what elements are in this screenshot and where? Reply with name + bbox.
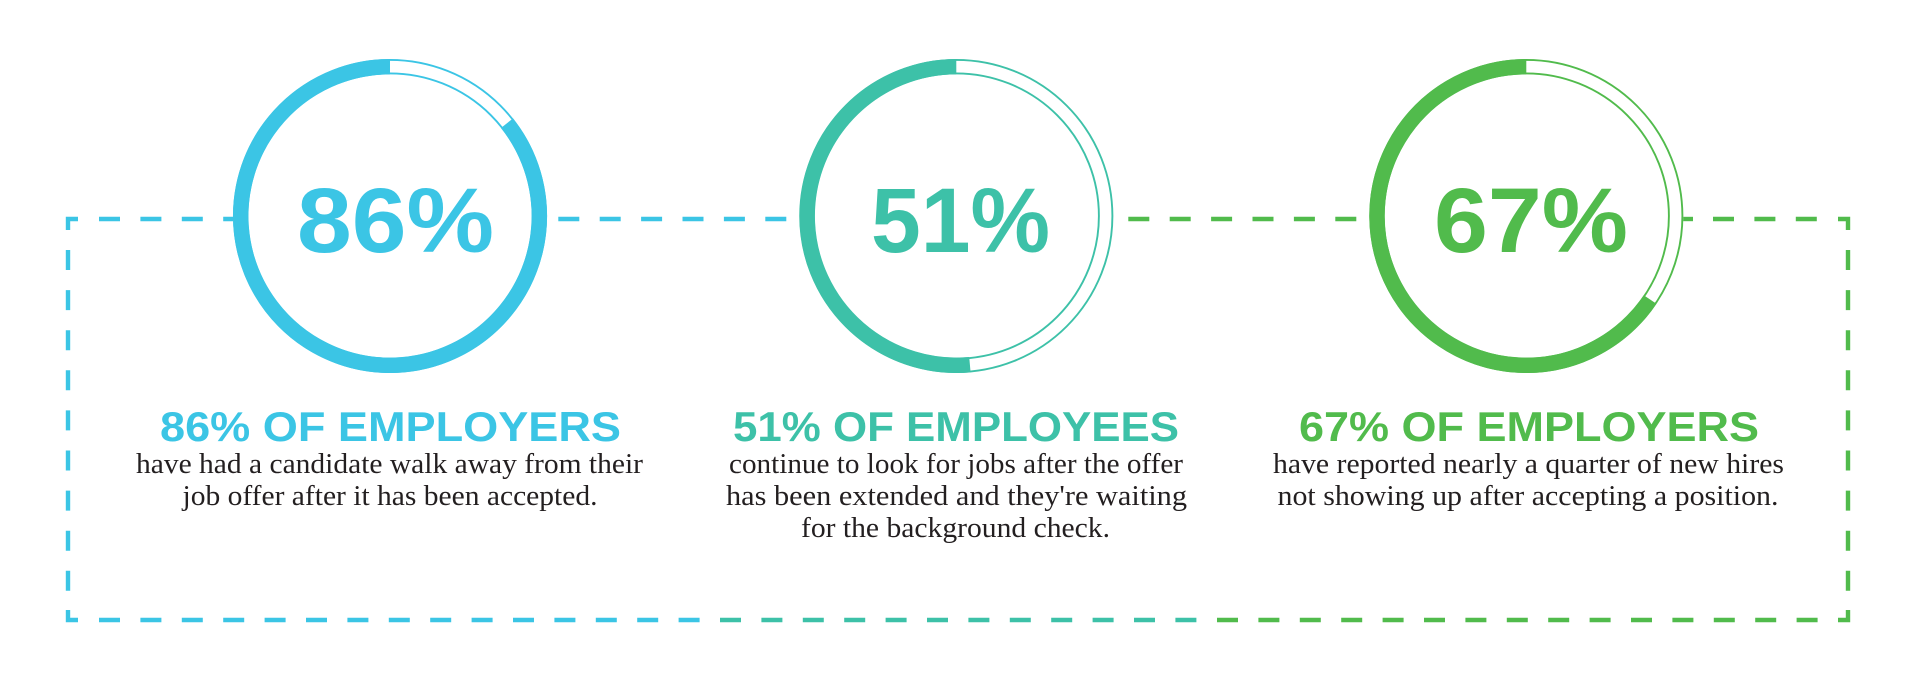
description: [1273, 449, 1784, 512]
description: not showing up after accepting a position.: [1278, 481, 1778, 512]
description: have had a candidate walk away from their: [136, 449, 644, 480]
big number 86%: 86%: [297, 170, 494, 272]
description: for the background check.: [801, 513, 1110, 544]
big number 67%: 67%: [1434, 170, 1628, 272]
big number 51%: 51%: [871, 170, 1050, 272]
description: job offer after it has been accepted.: [181, 481, 598, 512]
description: [136, 449, 644, 512]
description: [726, 449, 1187, 544]
description: continue to look for jobs after the offer: [729, 449, 1184, 480]
description: have reported nearly a quarter of new hires: [1273, 449, 1784, 480]
panel: 51% of employees: [726, 59, 1187, 544]
dashed connector frame: [68, 219, 1848, 620]
ring: 51% progress: [799, 59, 1113, 373]
panel: 67% of employers: [1273, 59, 1784, 512]
heading: 67% OF EMPLOYERS: [1299, 403, 1759, 450]
heading: 86% OF EMPLOYERS: [160, 403, 621, 450]
description: has been extended and they're waiting: [726, 481, 1187, 512]
heading: 51% OF EMPLOYEES: [733, 403, 1179, 450]
ring: 86% progress: [233, 59, 547, 373]
ring: 67% progress: [1369, 59, 1683, 373]
panel: 86% of employers: [136, 59, 644, 512]
